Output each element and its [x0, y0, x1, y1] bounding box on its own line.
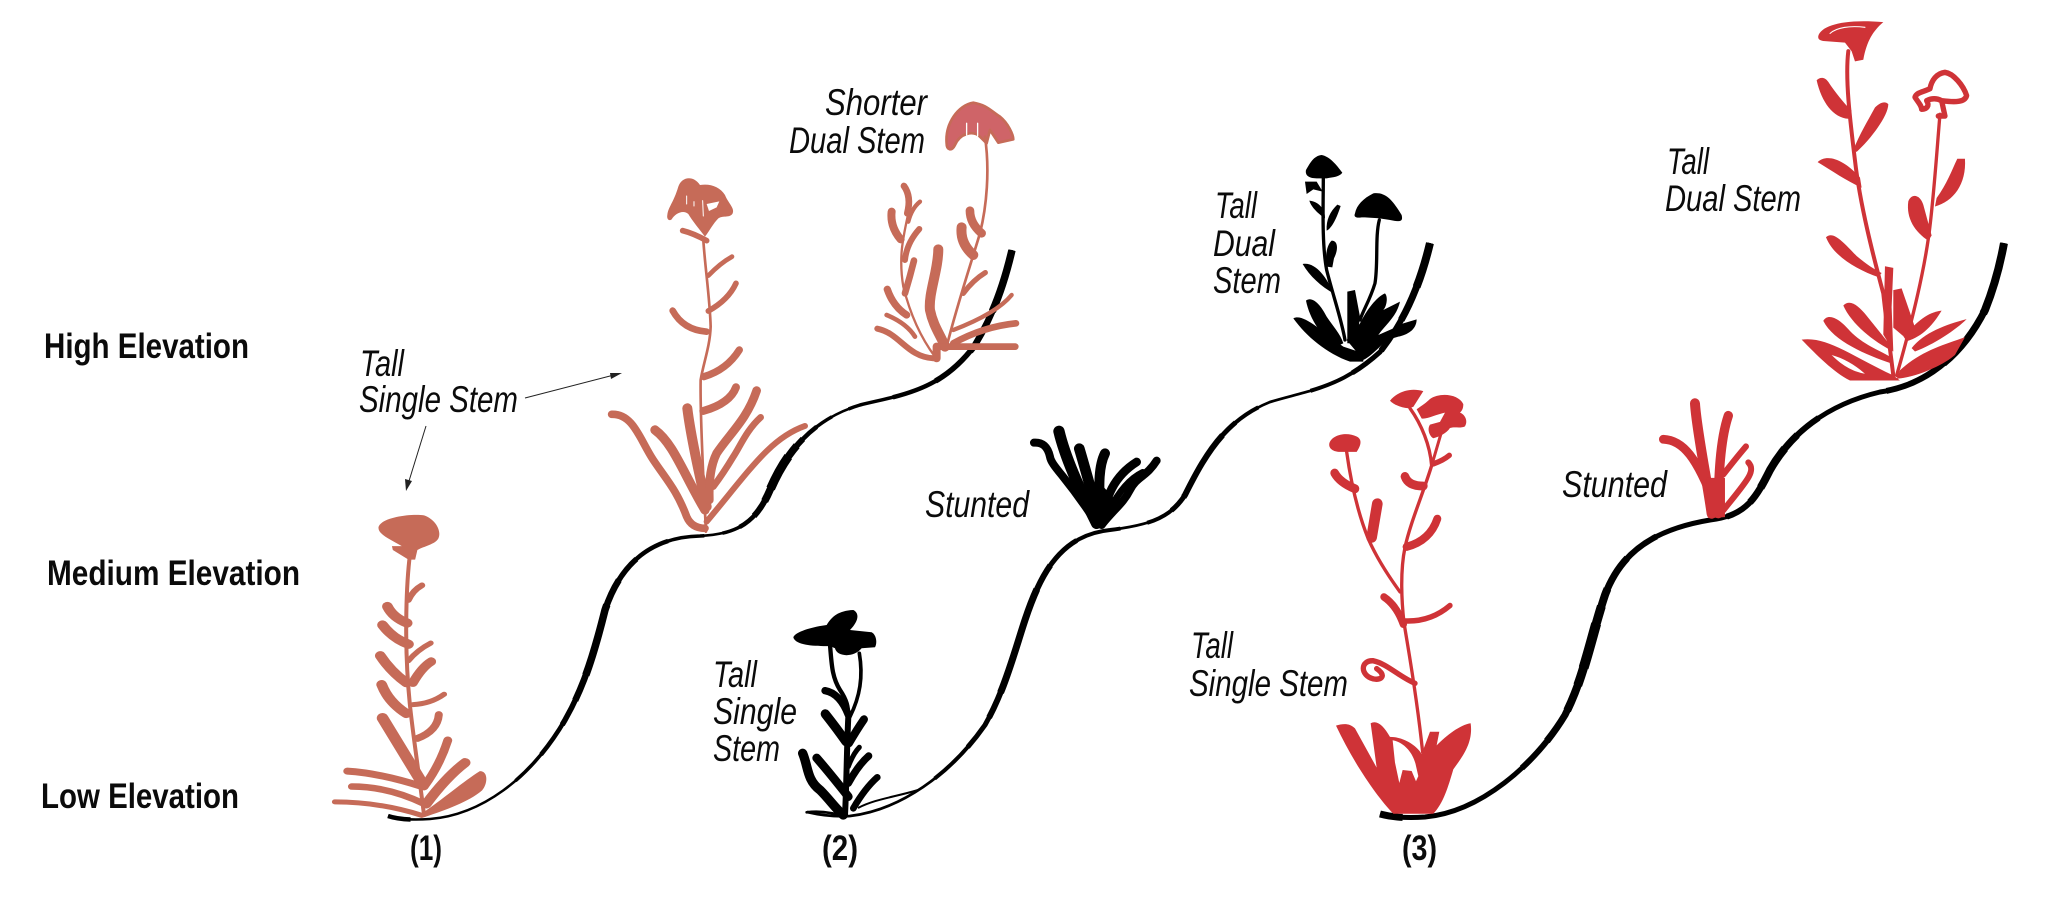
- plant: terracotta medium elevation tall single stem: [612, 178, 805, 532]
- series number 1: (1): [410, 829, 442, 868]
- series number 3: (3): [1402, 829, 1437, 868]
- mountain slope 1: [388, 250, 1012, 820]
- plant: red high elevation tall dual stem: [1802, 21, 1967, 381]
- caption: stunted (group 3): Stunted: [1562, 464, 1668, 505]
- caption: tall dual stem (group 2): Dual: [1213, 223, 1276, 264]
- caption: tall single stem (group 1): Single Stem: [359, 379, 518, 420]
- caption: tall single stem (group 2): Tall: [713, 654, 758, 695]
- arrow to medium plant: [525, 373, 622, 398]
- caption: shorter dual stem: Shorter: [825, 82, 928, 123]
- caption: tall dual stem (group 3): Tall: [1667, 141, 1710, 182]
- series number 2: (2): [822, 829, 858, 868]
- caption: tall single stem (group 2): Single: [713, 691, 797, 732]
- plant: black high elevation tall dual stem: [1293, 155, 1417, 362]
- arrow to low plant: [405, 426, 426, 491]
- caption: tall dual stem (group 2): [1213, 185, 1281, 301]
- caption: tall single stem (group 2): [713, 654, 797, 769]
- caption: tall single stem (group 3): Single Stem: [1189, 663, 1348, 704]
- caption: stunted (group 2): Stunted: [925, 484, 1030, 525]
- caption: tall dual stem (group 2): Tall: [1215, 185, 1258, 226]
- plant: terracotta high elevation shorter dual stem: [877, 103, 1016, 358]
- caption: shorter dual stem: [789, 82, 928, 161]
- label: medium elevation: Medium Elevation: [47, 554, 300, 593]
- plant: red medium elevation stunted: [1663, 403, 1751, 518]
- caption: tall single stem (group 1): [359, 343, 518, 420]
- plant: black medium elevation stunted: [1034, 431, 1157, 528]
- plant: red low elevation tall single stem: [1329, 390, 1471, 814]
- caption: shorter dual stem: Dual Stem: [789, 120, 925, 161]
- caption: tall single stem (group 3): [1189, 625, 1348, 704]
- caption: tall dual stem (group 3): [1665, 141, 1801, 219]
- caption: tall single stem (group 1): Tall: [360, 343, 405, 384]
- caption: tall single stem (group 2): Stem: [713, 728, 780, 769]
- caption: tall dual stem (group 2): Stem: [1213, 260, 1281, 301]
- mountain slope 3: [1380, 243, 2004, 818]
- caption: tall dual stem (group 3): Dual Stem: [1665, 178, 1801, 219]
- label: low elevation: Low Elevation: [41, 777, 239, 816]
- plant: terracotta low elevation tall single stem: [335, 515, 486, 817]
- elevation labels: [41, 327, 300, 816]
- plant: black low elevation tall single stem: [793, 610, 877, 817]
- label: high elevation: High Elevation: [44, 327, 249, 366]
- caption: tall single stem (group 3): Tall: [1191, 625, 1234, 666]
- mountain slope 2: [807, 243, 1430, 816]
